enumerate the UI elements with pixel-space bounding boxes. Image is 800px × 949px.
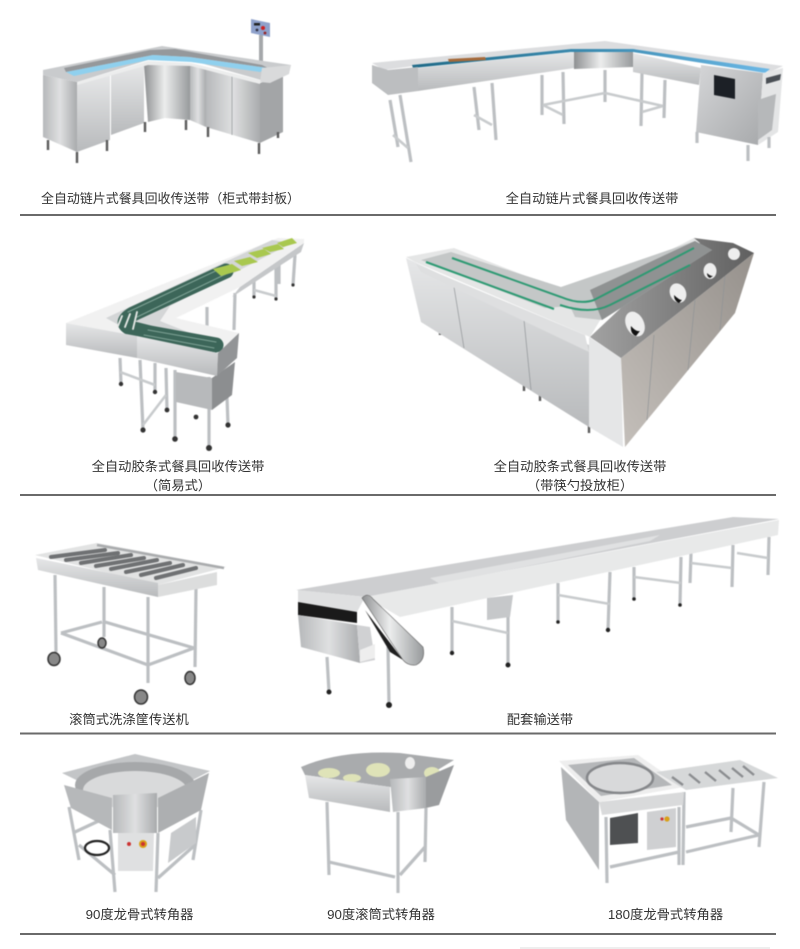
- wheels: [48, 638, 195, 704]
- top surface: [372, 41, 783, 72]
- caption: （简易式）: [145, 477, 211, 493]
- divider: [20, 732, 776, 734]
- legs: [120, 255, 295, 448]
- caption: （带筷勺投放柜）: [527, 477, 633, 493]
- side band: [365, 520, 779, 617]
- green belt: [118, 267, 228, 348]
- cabinet feet: [48, 120, 278, 163]
- white rim and trough: [406, 238, 712, 352]
- front panels: [66, 323, 239, 376]
- legs: [606, 782, 764, 883]
- green trays: [213, 238, 297, 276]
- holes: [621, 248, 740, 340]
- right cabinet panel: [621, 253, 754, 447]
- divider: [20, 214, 776, 216]
- front face: [599, 792, 684, 815]
- aprons: [36, 558, 217, 597]
- top rim: [62, 754, 210, 798]
- top surface dark section: [590, 238, 754, 358]
- caption: 滚筒式洗涤筐传送机: [69, 711, 189, 727]
- legs: [69, 807, 201, 892]
- caption: 90度龙骨式转角器: [86, 907, 193, 922]
- foot balls: [119, 283, 295, 451]
- cabinet side panel: [43, 75, 77, 152]
- basin top: [301, 753, 454, 787]
- front rim band: [77, 61, 260, 85]
- leg frame: [390, 70, 665, 162]
- machine: 180 degree keel corner: [559, 755, 778, 883]
- feet: [440, 328, 589, 433]
- green rails: [426, 248, 694, 310]
- caption: 全自动胶条式餐具回收传送带: [92, 458, 264, 474]
- caption: 180度龙骨式转角器: [608, 907, 723, 922]
- machine: rubber-strip conveyor, simple type: [66, 238, 304, 451]
- legs: [326, 537, 769, 708]
- legs: [327, 802, 426, 893]
- control box: [647, 808, 676, 850]
- control cabinet: [696, 65, 783, 161]
- top with basin: [559, 755, 684, 802]
- door seams: [454, 287, 531, 390]
- caption: 90度滚筒式转角器: [327, 906, 435, 922]
- machine: chain-plate conveyor with cabinet and sealing plate: [43, 19, 291, 163]
- feed box: [298, 590, 375, 663]
- long side face: [232, 243, 304, 297]
- frame: [55, 575, 196, 683]
- blue belt: [66, 55, 268, 76]
- rollers: [51, 550, 196, 578]
- produce: [318, 757, 440, 782]
- left cabinet panel: [406, 258, 589, 427]
- front panels: [372, 52, 701, 95]
- caption: 配套输送带: [507, 712, 573, 727]
- divider: [20, 933, 776, 935]
- blue belt: [412, 49, 770, 73]
- machine: rubber-strip conveyor with cutlery cabinet: [406, 238, 754, 447]
- machine: 90 degree keel corner: [62, 754, 210, 892]
- roller table top: [656, 760, 778, 790]
- top surface: [296, 517, 779, 597]
- top frame: [35, 543, 226, 585]
- machine: roller basket conveyor: [35, 543, 226, 704]
- machine: chain-plate conveyor: [372, 41, 783, 162]
- caption: 全自动胶条式餐具回收传送带: [494, 458, 666, 474]
- rim top: [43, 46, 291, 82]
- brown tray: [448, 57, 486, 62]
- faces: [305, 765, 454, 812]
- under cabinet: [176, 362, 235, 410]
- top surface: [66, 238, 304, 353]
- chute: [362, 595, 424, 665]
- control panel: [118, 833, 154, 871]
- cabinet doors: [77, 65, 283, 152]
- wings: [64, 773, 209, 833]
- caption: 全自动链片式餐具回收传送带（柜式带封板）: [41, 190, 300, 206]
- basin: [75, 762, 195, 809]
- corner panel: [589, 337, 623, 447]
- front box: [113, 793, 157, 833]
- machine: auxiliary conveyor belt: [296, 517, 779, 708]
- divider: [20, 494, 776, 496]
- machine: 90 degree roller corner: [301, 753, 454, 893]
- control box on pole: [251, 19, 270, 62]
- caption: 全自动链片式餐具回收传送带: [506, 190, 678, 206]
- side panel: [561, 767, 599, 870]
- dark slot: [610, 813, 638, 845]
- control box: [487, 595, 513, 620]
